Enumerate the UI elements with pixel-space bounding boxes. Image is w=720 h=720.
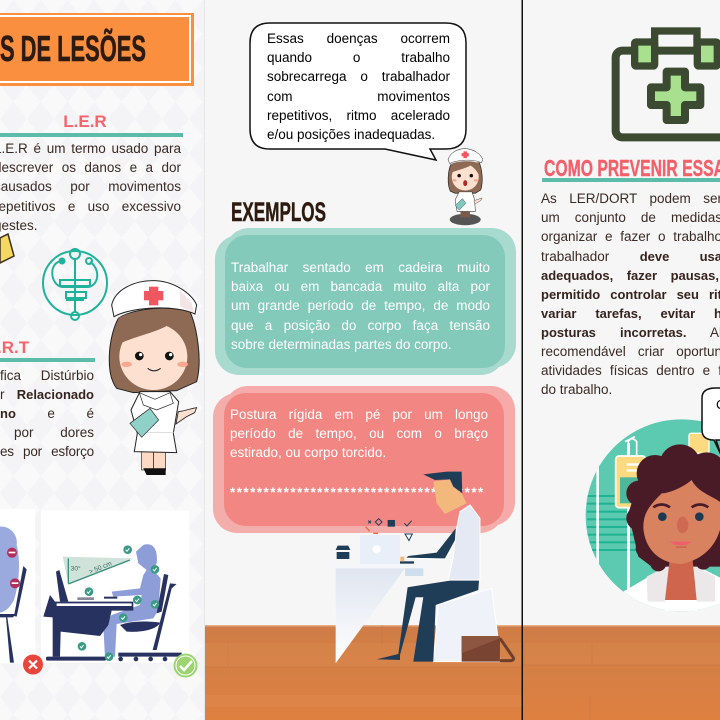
heading: D.O.R.T <box>0 338 95 362</box>
text: prevention: um conjunto de medidas <box>541 210 720 225</box>
speech bubble <box>250 23 466 160</box>
illustration: doctor <box>586 419 720 613</box>
text: bubble message: sobrecarrega o trabalhador <box>267 69 450 84</box>
text: red example <box>230 407 488 500</box>
small speech bubble <box>702 388 720 455</box>
illustration: nurse <box>109 281 199 475</box>
illustration: correct posture: > 50 cm <box>88 560 113 576</box>
icon: correct mark <box>174 654 198 678</box>
text: green example: Trabalhar sentado em cadeira muito <box>231 260 490 275</box>
small nurse <box>448 149 483 225</box>
text: prevention: do trabalho. <box>541 382 612 397</box>
text: D.O.R.T definition <box>0 368 94 459</box>
text: green example: baixa ou em bancada muito alta por <box>231 279 490 294</box>
icon: caduceus stethoscope <box>43 249 107 320</box>
text: prevention: atividades físicas dentro e f <box>541 363 720 378</box>
text: D.O.R.T definition: es por esforço <box>0 444 94 459</box>
title banner <box>0 13 194 86</box>
text: bubble message <box>267 31 450 142</box>
panel: types of injuries <box>0 0 205 720</box>
text: green example: que a posição do corpo faça tensão <box>231 318 490 333</box>
heading: EXEMPLOS: EXEMPLOS <box>231 197 326 227</box>
text: bubble message: repetitivos, ritmo acelerado <box>267 108 450 123</box>
text: prevention: permitido controlar seu rit <box>541 287 720 302</box>
text: D.O.R.T definition: por dores <box>14 425 94 440</box>
floor <box>205 625 523 720</box>
icon: yellow book <box>0 234 14 263</box>
icon: wrong mark <box>23 654 43 674</box>
text: green example: sobre determinadas partes do corpo. <box>231 337 452 352</box>
text: prevention: posturas incorretas. Al <box>541 325 720 340</box>
green example box <box>215 228 516 375</box>
text: L.E.R definition <box>0 141 181 233</box>
text: prevention: organizar e fazer o trabalho <box>541 229 720 244</box>
floor <box>523 625 720 720</box>
text: prevention: As LER/DORT podem ser <box>541 191 720 206</box>
text: red example: estirado, ou corpo torcido. <box>230 445 386 460</box>
illustration: wrong posture <box>0 509 35 663</box>
text: green example <box>231 260 490 352</box>
text: prevention <box>541 191 720 397</box>
text: bubble message: Essas doenças ocorrem <box>267 31 450 46</box>
red example box <box>213 386 515 533</box>
text: bubble message: e/ou posições inadequadas. <box>267 127 435 142</box>
panel: examples <box>205 0 523 720</box>
text: red example: período de tempo, ou com o braço <box>230 426 488 441</box>
icon: first aid kit <box>616 31 720 137</box>
illustration: man at desk <box>329 472 513 663</box>
text: prevention: trabalhador deve usa <box>541 249 720 264</box>
panel: how to prevent <box>523 27 720 720</box>
text: D.O.R.T definition: r Relacionado <box>0 387 94 402</box>
text: red example: ************************************** <box>230 485 485 500</box>
text: green example: um grande período de tempo, de modo <box>231 298 490 313</box>
text: bubble message: com movimentos <box>267 89 450 104</box>
text: prevention: recomendável criar oportun <box>541 344 720 359</box>
text: prevention: variar tarefas, evitar h <box>541 306 720 321</box>
text: D.O.R.T definition: fica Distúrbio <box>0 368 94 383</box>
heading: L.E.R: L.E.R <box>63 112 107 131</box>
text: D.O.R.T definition: no e é <box>0 406 94 421</box>
text: prevention: adequados, fazer pausas, <box>541 268 719 283</box>
text: bubble message: quando o trabalho <box>267 50 450 65</box>
heading: L.E.R <box>0 112 183 137</box>
illustration: correct posture <box>41 511 189 663</box>
text: red example: Postura rígida em pé por um longo <box>230 407 488 422</box>
illustration: correct posture: 30° <box>71 565 81 573</box>
